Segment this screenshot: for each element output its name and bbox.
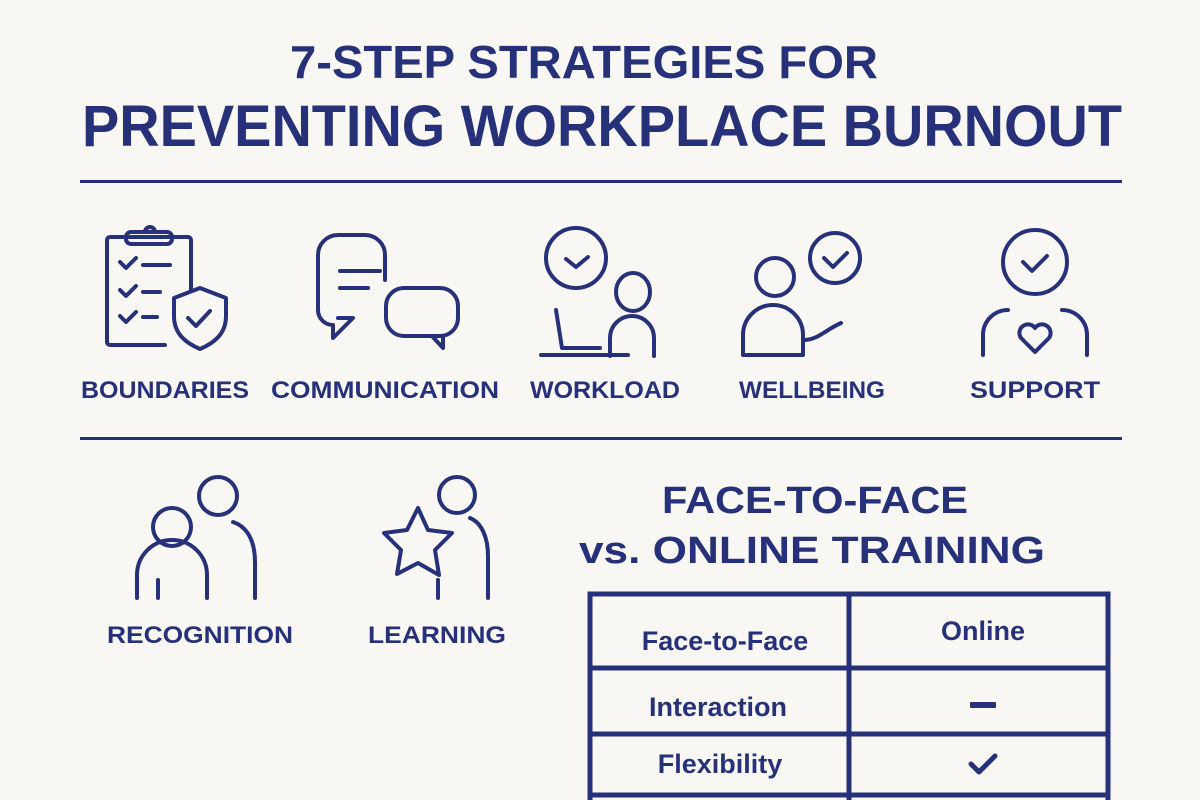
icon: chat bubbles [318,235,458,348]
comparison table: Online [941,616,1025,646]
icon: support person heart [983,230,1087,355]
icon: recognition two people [137,477,255,598]
title [82,36,1122,159]
labels: BOUNDARIES [81,377,249,404]
icon: clipboard with shield [107,227,226,349]
labels: LEARNING [368,622,506,649]
comparison table: Interaction [649,692,787,722]
title: 7-STEP STRATEGIES FOR [290,36,878,88]
labels: WORKLOAD [530,377,680,404]
icon: wellbeing person [743,233,860,355]
icon: workload person desk [541,228,654,356]
icon: learning star person [384,477,488,598]
comparison heading: vs. ONLINE TRAINING [579,530,1045,572]
labels: WELLBEING [739,377,885,404]
labels: COMMUNICATION [271,377,499,404]
labels: RECOGNITION [107,622,293,649]
comparison heading [579,480,1045,572]
title: PREVENTING WORKPLACE BURNOUT [82,94,1122,159]
labels [81,377,1100,649]
comparison table [590,594,1108,800]
comparison table: Flexibility [658,749,782,779]
comparison heading: FACE-TO-FACE [662,480,968,522]
labels: SUPPORT [970,377,1100,404]
icons row 1 [107,227,1087,598]
comparison table: Face-to-Face [642,626,808,656]
